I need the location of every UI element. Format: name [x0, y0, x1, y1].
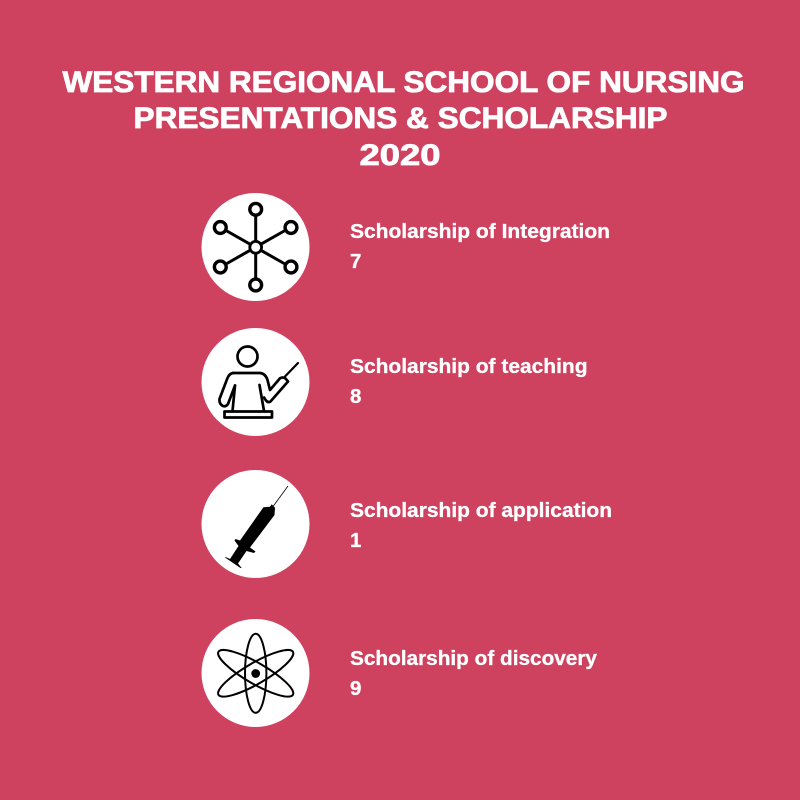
panel: scholarship of discovery: [202, 619, 598, 727]
title: [62, 66, 744, 172]
panel: scholarship of teaching: [202, 328, 588, 436]
panel: scholarship of integration: [202, 193, 610, 301]
label: application: Scholarship of application: [350, 499, 612, 522]
value: 7: 7: [350, 250, 361, 273]
icon: atom: [202, 619, 310, 727]
panel: scholarship of application: [202, 470, 612, 578]
value: 1: 1: [350, 529, 361, 552]
label: discovery: Scholarship of discovery: [350, 647, 598, 670]
icon detail: pointer: [285, 363, 298, 376]
value: 8: 8: [350, 385, 361, 408]
icon: syringe: [202, 470, 310, 578]
title: PRESENTATIONS & SCHOLARSHIP: [134, 102, 668, 135]
icon: teacher: [202, 328, 310, 436]
icon: network: [202, 193, 310, 301]
value: 9: 9: [350, 677, 361, 700]
label: integration: Scholarship of Integration: [350, 220, 610, 243]
title: WESTERN REGIONAL SCHOOL OF NURSING: [62, 66, 744, 99]
title: 2020: [360, 139, 440, 172]
label: teaching: Scholarship of teaching: [350, 355, 588, 378]
